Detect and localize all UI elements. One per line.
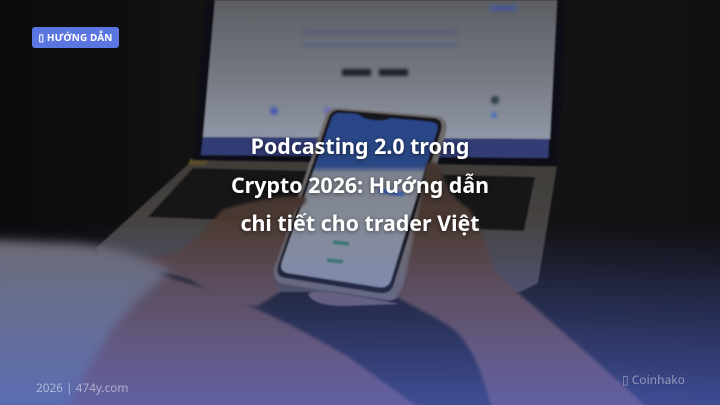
screen content <box>270 5 517 118</box>
fingertip under phone <box>308 291 400 306</box>
left forearm <box>50 268 425 405</box>
phone case <box>273 108 447 300</box>
title <box>231 132 489 238</box>
yellow hinge highlight <box>188 159 208 165</box>
keyboard <box>148 168 535 231</box>
phone screen <box>281 113 438 287</box>
title: chi tiết cho trader Việt <box>240 209 480 238</box>
laptop base <box>96 158 557 292</box>
brand label: ▯ Coinhako <box>622 371 685 388</box>
category badge: ▯ HƯỚNG DẪN <box>39 30 112 44</box>
phone bezel <box>277 110 442 293</box>
phone <box>273 108 447 300</box>
title: Podcasting 2.0 trong <box>251 132 469 161</box>
sleeve <box>0 240 172 405</box>
left hand <box>130 196 306 306</box>
footer year and site: 2026 | 474y.com <box>36 380 128 396</box>
blue-purple bottom overlay <box>0 225 720 405</box>
phone list pills <box>333 240 349 246</box>
right hand and wrist <box>396 161 650 405</box>
laptop lid <box>193 0 566 166</box>
title: Crypto 2026: Hướng dẫn <box>231 170 489 200</box>
category badge <box>32 27 119 48</box>
